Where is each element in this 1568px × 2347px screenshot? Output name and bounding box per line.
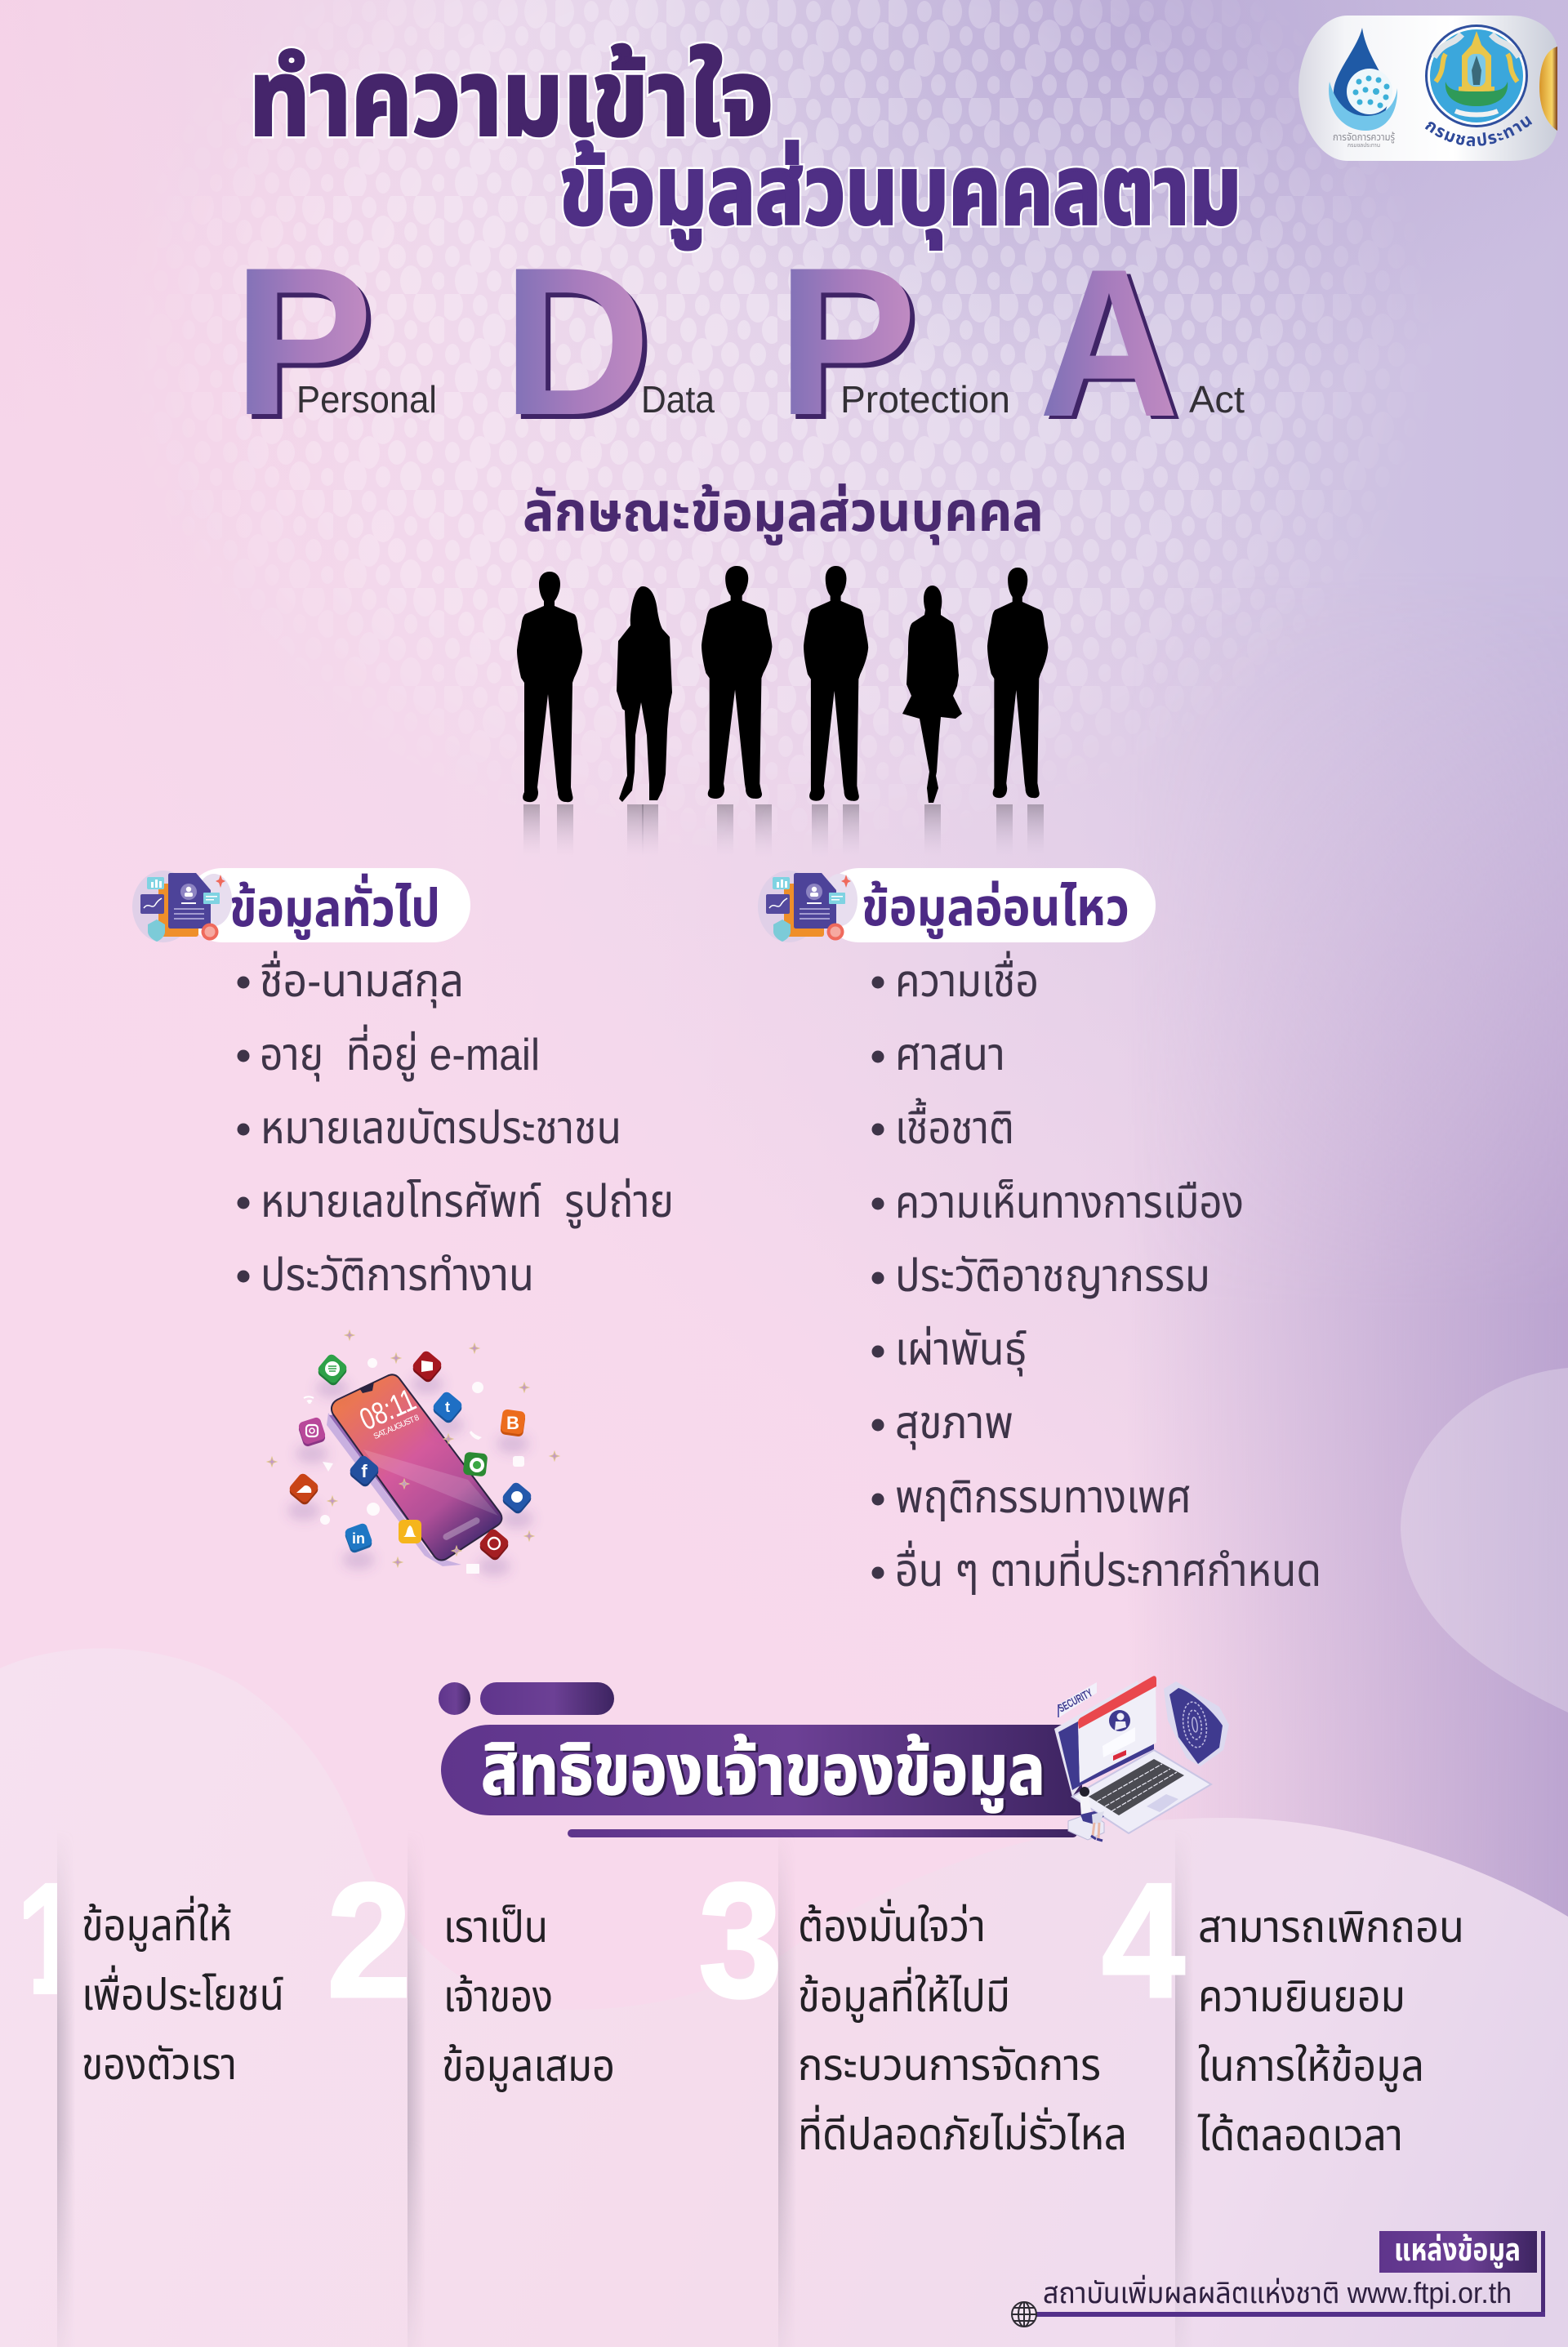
phone clock: SAT, AUGUST 8	[372, 1413, 421, 1441]
title	[249, 38, 1241, 249]
source text: สถาบันเพิ่มผลผลิตแห่งชาติ www.ftpi.or.th	[1043, 2274, 1512, 2309]
title line 1: ทำความเข้าใจ	[249, 38, 773, 158]
column dividers	[57, 1829, 1193, 2347]
text right 1	[82, 1895, 284, 2089]
letter A: Act: A	[1044, 228, 1184, 464]
icon: water drop logo: การจัดการความรู้	[1333, 131, 1396, 143]
number 2: 2	[327, 1850, 412, 2032]
app icons: t	[445, 1399, 450, 1415]
text right 4: ได้ตลอดเวลา	[1197, 2111, 1403, 2160]
text right 3	[798, 1899, 1127, 2159]
icon: profile document	[758, 871, 858, 942]
pill heading: general data: ข้อมูลทั่วไป	[229, 873, 440, 940]
list: sensitive data items: อื่น ๆ ตามที่ประกาศกำหนด	[895, 1540, 1321, 1596]
heading: personal data characteristics: ลักษณะข้อมูลส่วนบุคคล	[523, 481, 1044, 546]
right 1	[24, 1883, 283, 2079]
list: sensitive data items: เผ่าพันธุ์	[895, 1324, 1027, 1376]
letter A: Act: A	[1039, 225, 1179, 461]
list: sensitive data items: ประวัติอาชญากรรม	[895, 1250, 1210, 1301]
list: sensitive data items: พฤติกรรมทางเพศ	[895, 1472, 1192, 1522]
pill heading: general data	[185, 868, 470, 942]
icon: globe	[1012, 2302, 1036, 2327]
list: general data items	[237, 951, 674, 1300]
logo badge	[1298, 16, 1557, 161]
text right 2: เจ้าของ	[443, 1972, 553, 2021]
illustration: laptop security	[1054, 1676, 1229, 1841]
list: general data items: หมายเลขบัตรประชาชน	[261, 1102, 621, 1153]
pill heading: sensitive data: ข้อมูลอ่อนไหว	[862, 878, 1129, 939]
icon: profile document	[132, 871, 232, 942]
list: general data items: อายุ ที่อยู่ e-mail	[260, 1024, 540, 1082]
number 4: 4	[1102, 1850, 1185, 2032]
panel: general data	[132, 868, 674, 1300]
phone clock: 08:11	[355, 1383, 421, 1437]
letter P: Protection	[777, 223, 1010, 464]
text right 2: ข้อมูลเสมอ	[442, 2042, 615, 2092]
list: sensitive data items	[872, 951, 1321, 1596]
letter D: Data: Data	[641, 378, 715, 421]
letter P: Personal: P	[238, 228, 378, 464]
right 2	[331, 1882, 612, 2092]
app icons	[287, 1349, 533, 1562]
title line 2: ข้อมูลส่วนบุคคลตาม	[559, 137, 1241, 249]
silhouettes of six people	[517, 566, 1048, 857]
icon: royal irrigation department seal: กรมชลประทาน	[1424, 116, 1532, 146]
number 3: 3	[698, 1850, 782, 2032]
sign: security: SECURITY	[1056, 1686, 1095, 1715]
figure: woman on books	[1068, 1787, 1104, 1841]
letter D: Data: D	[502, 223, 651, 459]
app icons: in	[352, 1530, 365, 1547]
text right 4	[1197, 1903, 1464, 2160]
banner title: สิทธิของเจ้าของข้อมูล	[481, 1731, 1045, 1813]
icon: royal irrigation department seal	[1424, 24, 1532, 146]
list: general data items: หมายเลขโทรศัพท์ รูปถ่าย	[261, 1176, 674, 1229]
title line 1: ทำความเข้าใจ	[249, 38, 773, 158]
letter A: Act: Act	[1189, 378, 1245, 421]
letter P: Protection: Protection	[840, 378, 1010, 421]
text right 2	[442, 1903, 615, 2092]
section banner: data subject rights	[439, 1682, 1082, 1837]
sparkles	[267, 1330, 559, 1567]
text right 3: ที่ดีปลอดภัยไม่รั่วไหล	[798, 2104, 1127, 2159]
source credit	[1012, 2231, 1545, 2327]
list: sensitive data items: ศาสนา	[895, 1029, 1005, 1080]
text right 4: ในการให้ข้อมูล	[1198, 2042, 1424, 2092]
text right 3: กระบวนการจัดการ	[798, 2041, 1101, 2090]
list: sensitive data items: เชื้อชาติ	[895, 1098, 1014, 1153]
icon: water drop logo: กรมชลประทาน	[1348, 143, 1380, 149]
phone clock	[355, 1383, 424, 1444]
letter P: Protection: P	[777, 223, 917, 459]
letter D: Data: D	[507, 228, 656, 464]
text right 1: เพื่อประโยชน์	[82, 1965, 284, 2020]
letter P: Personal	[233, 223, 437, 464]
number 1: 1	[16, 1850, 84, 2032]
pill heading: sensitive data	[822, 868, 1156, 942]
text right 1: ข้อมูลที่ให้	[82, 1895, 232, 1952]
icon: fingerprint shield	[1164, 1681, 1229, 1766]
list: sensitive data items: สุขภาพ	[895, 1397, 1013, 1450]
icon: water drop logo	[1329, 28, 1397, 149]
right 3	[701, 1882, 1124, 2149]
illustration: phone with social media icons	[267, 1330, 559, 1576]
text right 1: ของตัวเรา	[82, 2040, 237, 2089]
PDPA acronym	[233, 223, 1245, 464]
title line 2: ข้อมูลส่วนบุคคลตาม	[559, 137, 1241, 249]
app icons: B	[506, 1413, 519, 1433]
source label: แหล่งข้อมูล	[1394, 2233, 1521, 2269]
sign: security	[1056, 1682, 1097, 1717]
text right 3: ต้องมั่นใจว่า	[798, 1899, 986, 1951]
letter P: Personal: Personal	[296, 378, 437, 421]
text right 4: สามารถเพิกถอน	[1198, 1903, 1464, 1952]
list: sensitive data items: ความเชื่อ	[895, 951, 1039, 1006]
list: general data items: ประวัติการทำงาน	[261, 1249, 534, 1300]
white floating glyphs	[304, 1358, 524, 1574]
letter P: Personal: P	[233, 223, 373, 459]
right 4	[1102, 1850, 1464, 2160]
app icons: f	[361, 1461, 368, 1481]
text right 3: ข้อมูลที่ให้ไปมี	[798, 1966, 1010, 2023]
text right 4: ความยินยอม	[1198, 1972, 1405, 2021]
list: general data items: ชื่อ-นามสกุล	[260, 951, 464, 1008]
list: sensitive data items: ความเห็นทางการเมือง	[895, 1177, 1244, 1227]
text right 2: เราเป็น	[443, 1903, 548, 1952]
panel: sensitive data	[758, 868, 1321, 1596]
letter P: Protection: P	[782, 228, 922, 464]
